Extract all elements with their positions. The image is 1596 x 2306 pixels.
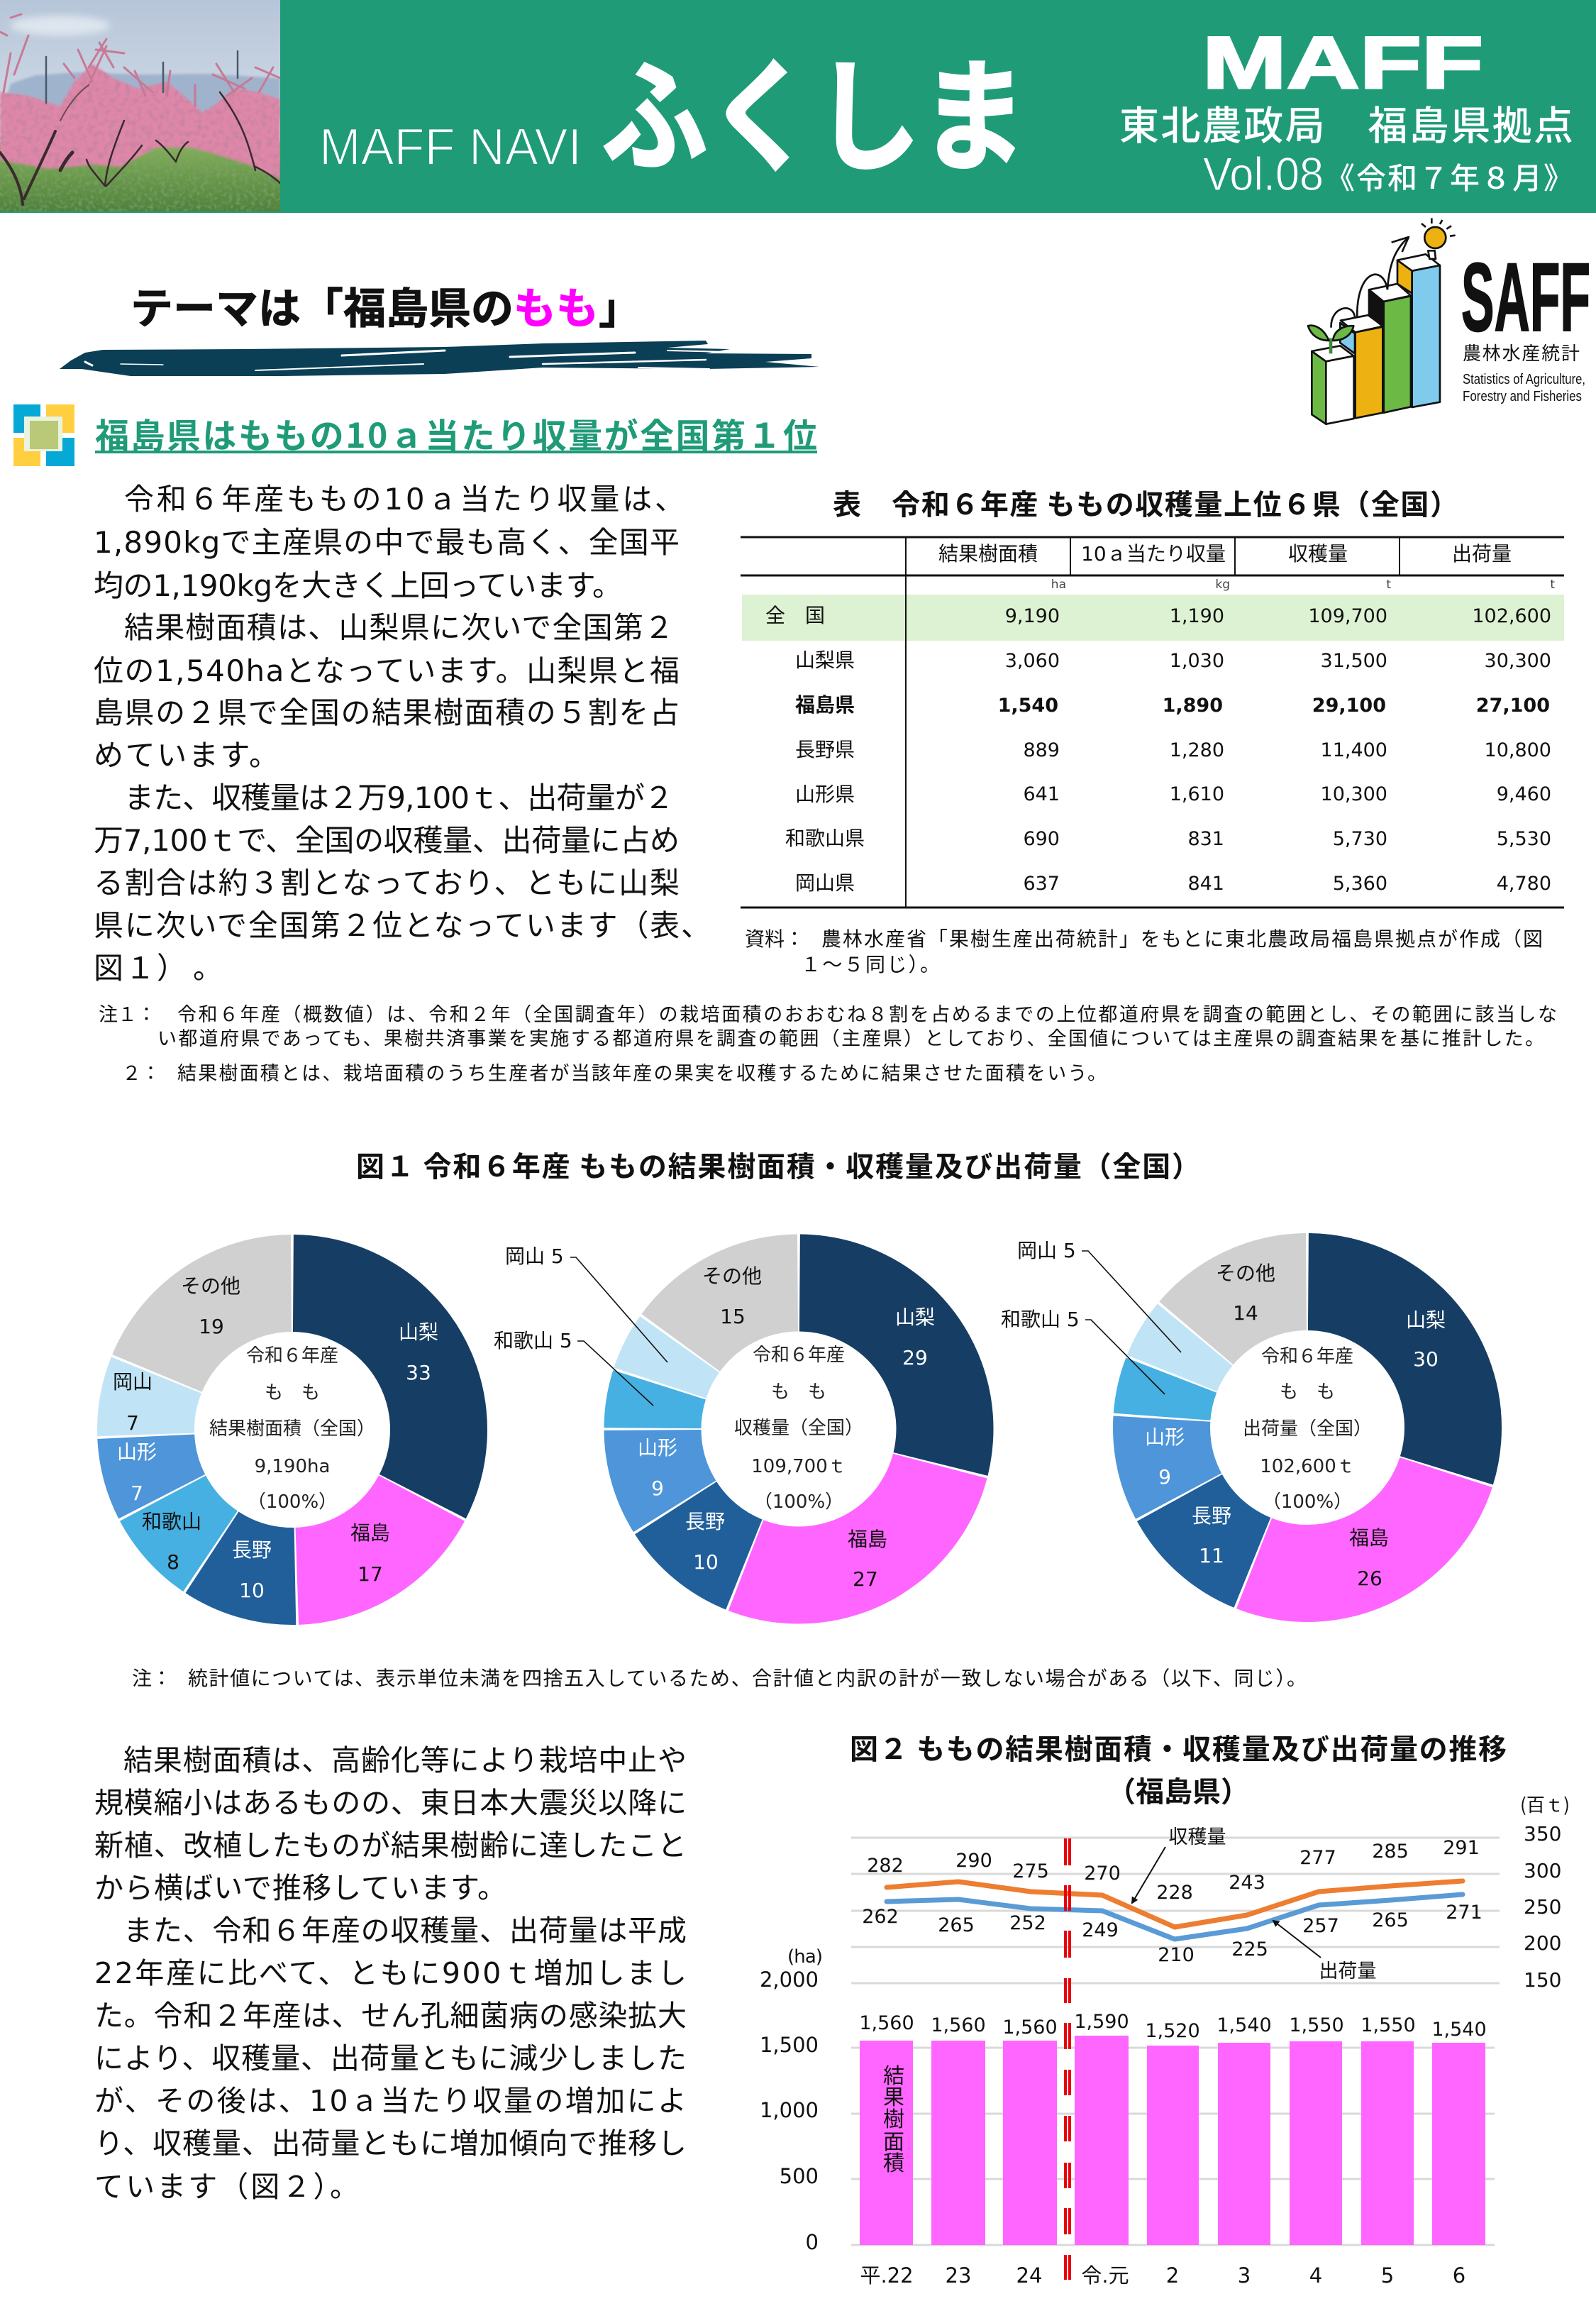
centre caption: 結果樹面積（全国） [209,1418,375,1440]
row: Okayama: 5,360 [1333,873,1387,895]
bar value labels: 1,550 [1289,2014,1344,2036]
row: Wakayama: 690 [1023,828,1060,850]
slice labels: 14 [1233,1301,1258,1325]
slice labels: 長野 [1192,1504,1231,1528]
row: national: 全 国 [765,604,825,627]
row: Nagano: 1,280 [1170,739,1224,761]
slice labels: 7 [131,1482,143,1505]
slice labels: 山形 [117,1440,157,1464]
unit row: kg [1215,578,1230,592]
harvest value labels: 291 [1443,1837,1480,1859]
figure 2 title: 図２ ももの結果樹面積・収穫量及び出荷量の推移 [850,1726,1507,1767]
row: Nagano: 889 [1023,739,1060,761]
body text: second block: が、その後は、10ａ当たり収量の増加によ [94,2084,687,2118]
right axis labels: 350 [1524,1822,1561,1846]
centre caption: （100%） [1263,1491,1352,1513]
harvest value labels: 270 [1084,1863,1121,1885]
x axis labels: 6 [1453,2263,1465,2288]
row: Nagano: 長野県 [795,738,855,761]
slice labels: 長野 [232,1538,272,1562]
row: Wakayama: 和歌山県 [785,827,865,850]
centre caption: 出荷量（全国） [1243,1418,1372,1440]
callout: harvest [1132,1826,1226,1903]
centre caption: 令和６年産 [1261,1346,1353,1367]
body text: first block: 島県の２県で全国の結果樹面積の５割を占 [94,695,680,730]
slice labels: 山形 [1145,1425,1185,1449]
row: Fukushima: 27,100 [1476,695,1550,717]
shipment value labels: 249 [1082,1919,1119,1941]
centre caption: 令和６年産 [246,1345,338,1367]
row: Fukushima: 1,540 [998,695,1058,717]
column headers: 収穫量 [1288,542,1348,566]
table rules [741,537,1564,907]
right axis labels: (百ｔ) [1520,1791,1570,1817]
row: national: 109,700 [1308,605,1387,627]
bar value labels: 1,560 [931,2014,986,2036]
row: Yamanashi: 山梨県 [795,649,855,672]
centre caption: 令和６年産 [753,1345,845,1366]
shipment value labels [862,1902,1483,1966]
column headers: 結果樹面積 [938,542,1038,566]
slice labels: 11 [1199,1544,1224,1567]
body text: second block: た。令和２年産は、せん孔細菌病の感染拡大 [94,1999,687,2033]
column headers: 出荷量 [1452,542,1512,566]
left axis labels: 0 [806,2230,819,2254]
harvest value labels: 282 [867,1855,904,1877]
table [741,537,1564,907]
row: national [765,604,1551,627]
harvest value labels: 277 [1299,1847,1336,1869]
x axis labels: 3 [1238,2263,1251,2288]
slice labels [638,1264,935,1591]
body text: second block: り、収穫量、出荷量ともに増加傾向で推移し [94,2126,687,2161]
row: Fukushima [795,693,1550,717]
line: shipment [887,1894,1463,1939]
harvest value labels: 228 [1156,1882,1193,1904]
unit row [1051,578,1555,592]
row: Wakayama: 831 [1187,828,1224,850]
centre caption: 9,190ha [255,1456,330,1477]
organisation name: 東北農政局 福島県拠点 [1119,94,1573,152]
bar value labels: 1,550 [1361,2014,1416,2036]
figure 2 title: （福島県） [1107,1769,1249,1810]
national row highlight [742,595,1564,641]
row: national: 1,190 [1170,605,1224,627]
row: Fukushima: 1,890 [1163,695,1223,717]
slice labels: 26 [1357,1567,1382,1590]
slice labels: 山梨 [399,1320,438,1344]
slice labels: その他 [702,1264,762,1288]
x axis labels: 2 [1166,2263,1179,2288]
shipment value labels: 262 [862,1906,899,1928]
vertical bar label: 果 [883,2080,904,2111]
slice labels: 山形 [638,1436,677,1460]
body text: first block: 位の1,540haとなっています。山梨県と福 [94,653,680,688]
figure 1 note: 統計値については、表示単位未満を四捨五入しているため、合計値と内訳の計が一致しない場合がある（以下、同じ）。 [188,1667,1307,1690]
MAFF logotype: MAFF [1202,22,1483,104]
bar value labels [859,2011,1487,2042]
left axis labels: 2,000 [760,1968,819,1992]
body text: first block: 。 [193,951,223,986]
body text: second block: から横ばいで推移しています。 [94,1871,506,1905]
footnotes: ２： [122,1063,160,1085]
shipment value labels: 210 [1158,1944,1195,1966]
slice labels: 福島 [350,1521,390,1545]
combo chart: bearing area, harvest and shipment trend [760,1791,1570,2288]
callout: Okayama: 岡山 5 [1017,1239,1076,1262]
row: Okayama: 岡山県 [795,871,855,895]
slice labels: その他 [1216,1262,1275,1285]
table source note: 資料： [745,927,804,951]
centre caption: も も [771,1381,826,1403]
centre caption [734,1345,863,1513]
body text: second block: 22年産に比べて、ともに900ｔ増加しまし [94,1956,687,1990]
row: Fukushima: 福島県 [795,693,855,717]
row: Nagano: 11,400 [1321,739,1387,761]
right axis labels: 200 [1524,1931,1561,1955]
table source note [745,927,1543,976]
left axis labels: 1,500 [760,2033,819,2057]
row: Yamagata: 9,460 [1497,783,1551,805]
centre caption: 102,600ｔ [1260,1456,1355,1477]
grid lines [851,1838,1500,2245]
footnotes: 令和６年産（概数値）は、令和２年（全国調査年）の栽培面積のおおむね８割を占めるまでの上位都道府県を調査の範囲とし、その範囲に該当しな [177,1004,1557,1026]
unit row: ha [1051,578,1066,592]
logo Japanese caption: 農林水産統計 [1463,339,1580,365]
shipment value labels: 265 [1372,1909,1409,1931]
body text: second block: 規模縮小はあるものの、東日本大震災以降に [94,1786,687,1820]
centre caption [209,1345,375,1513]
vertical bar label: 結 [883,2058,904,2090]
left axis labels: 1,000 [760,2098,819,2122]
body text: second block: により、収穫量、出荷量ともに減少しました [94,2041,687,2075]
header band [0,0,1596,213]
slice labels: 33 [406,1361,431,1384]
donut chart: shipment [1001,1239,1453,1590]
left axis labels: (ha) [787,1946,823,1968]
harvest value labels: 285 [1372,1841,1409,1863]
row: Yamanashi: 1,030 [1170,650,1224,672]
row: Nagano [795,738,1551,761]
row: Okayama: 841 [1187,873,1224,895]
theme title: テーマは「福島県のもも」 [131,275,641,336]
figure 2 title [850,1726,1507,1810]
body text: first block: また、収穫量は２万9,100ｔ、出荷量が２ [124,780,674,815]
callout: Okayama [505,1245,667,1362]
shipment value labels: 257 [1302,1915,1339,1937]
row: Wakayama: 5,730 [1333,828,1387,850]
row: Yamanashi: 30,300 [1485,650,1551,672]
red axis break: Heisei to Reiwa [1065,1838,1070,2280]
callout: shipment [1273,1921,1376,1982]
slice labels: 17 [358,1562,383,1586]
vertical bar label: 面 [883,2124,904,2156]
bars: bearing area [860,2036,1485,2245]
column headers: 10ａ当たり収量 [1081,542,1226,566]
right axis labels: 150 [1524,1968,1561,1992]
slice labels: 和歌山 [142,1510,201,1533]
bar value labels: 1,560 [859,2012,914,2034]
slice labels: その他 [181,1274,240,1298]
photo: peach orchard in bloom [0,0,280,211]
slice labels: 長野 [685,1510,725,1533]
table title: 表 令和６年産 ももの収穫量上位６県（全国） [833,482,1458,523]
shipment value labels: 271 [1446,1902,1483,1924]
bar value labels: 1,540 [1217,2014,1272,2036]
harvest value labels: 243 [1229,1872,1265,1894]
line: harvest [887,1881,1463,1927]
slice labels [113,1274,438,1602]
unit row: t [1386,578,1391,592]
body text: first block: 万7,100ｔで、全国の収穫量、出荷量に占め [94,823,680,858]
bar value labels: 1,540 [1431,2019,1487,2041]
unit row: t [1550,578,1555,592]
body text: first block: 結果樹面積は、山梨県に次いで全国第２ [124,610,674,645]
row: Yamagata: 山形県 [795,783,855,806]
x axis labels: 24 [1016,2263,1042,2288]
body text: first block: 図１） [94,951,187,986]
shipment value labels: 252 [1009,1912,1046,1934]
callout: Wakayama [1001,1308,1165,1394]
slice labels: 30 [1413,1347,1439,1371]
row: national: 9,190 [1005,605,1060,627]
body text: first block: 均の1,190kgを大きく上回っています。 [94,568,622,603]
callout: harvest: 収穫量 [1169,1826,1226,1848]
x axis labels: 4 [1309,2263,1322,2288]
brush stroke under theme title [60,341,819,376]
body text: first block: めています。 [94,738,279,773]
row: national: 102,600 [1472,605,1551,627]
row: Okayama: 4,780 [1497,873,1551,895]
row: Yamanashi: 3,060 [1005,650,1060,672]
body text: second block: また、令和６年産の収穫量、出荷量は平成 [123,1914,687,1948]
issue date: 《令和７年８月》 [1325,155,1573,198]
harvest value labels [867,1837,1480,1904]
right axis labels: 250 [1524,1895,1561,1919]
row: Yamanashi [795,649,1551,672]
slice labels: 15 [720,1305,746,1328]
callout: Wakayama: 和歌山 5 [494,1329,572,1352]
icon: rising bar chart with sprout and light bulb [1308,218,1456,424]
harvest value labels: 275 [1012,1860,1049,1882]
footnotes: 結果樹面積とは、栽培面積のうち生産者が当該年産の果実を収穫するために結果させた面積をいう。 [177,1063,1107,1085]
centre caption: （100%） [754,1491,843,1513]
column headers [938,542,1512,566]
slice labels: 9 [651,1477,664,1500]
right axis labels: 300 [1524,1859,1561,1882]
donut chart: bearing area [113,1274,438,1602]
shipment value labels: 265 [938,1914,975,1936]
centre caption [1243,1346,1372,1513]
bar value labels: 1,520 [1145,2020,1200,2042]
slice labels: 8 [167,1550,179,1574]
slice labels: 山梨 [1406,1308,1446,1332]
slice labels: 福島 [848,1528,887,1551]
table source note: 農林水産省「果樹生産出荷統計」をもとに東北農政局福島県拠点が作成（図 [821,927,1543,951]
row: Yamagata: 10,300 [1321,783,1387,805]
body text: second block: 結果樹面積は、高齢化等により栽培中止や [123,1743,687,1777]
x axis labels: 令.元 [1081,2263,1129,2288]
slice labels: 10 [693,1550,719,1574]
vertical bar label: 樹 [883,2102,904,2133]
row: Yamagata: 1,610 [1170,783,1224,805]
body text: first block [94,482,711,986]
slice labels: 10 [239,1579,265,1602]
slice labels: 山梨 [895,1306,935,1329]
row: Nagano: 10,800 [1485,739,1551,761]
bar value labels: 1,560 [1002,2017,1058,2039]
row: Okayama: 637 [1023,873,1060,895]
row: Wakayama [785,827,1551,850]
body text: first block: 令和６年産ももの10ａ当たり収量は、 [124,482,685,517]
harvest value labels: 290 [955,1850,992,1872]
row: Fukushima: 29,100 [1312,695,1386,717]
figure 1 title: 図１ 令和６年産 ももの結果樹面積・収穫量及び出荷量（全国） [356,1144,1200,1185]
vertical bar label [883,2058,904,2177]
left axis labels: 500 [780,2164,819,2188]
body text: first block: る割合は約３割となっており、ともに山梨 [94,866,680,900]
x axis labels: 5 [1381,2263,1394,2288]
slice labels: 福島 [1349,1526,1389,1550]
slice labels: 7 [126,1411,139,1435]
row: Yamagata: 641 [1023,783,1060,805]
volume number: Vol.08 [1203,148,1324,200]
body text: first block: 1,890kgで主産県の中で最も高く、全国平 [94,525,680,560]
donut chart: harvest [494,1245,945,1591]
row: Yamagata [795,783,1551,806]
slice labels: 岡山 [113,1370,153,1394]
table source note: １～５同じ）。 [801,953,940,976]
right axis labels [1520,1791,1570,1992]
slice labels: 29 [902,1346,928,1369]
footnotes: い都道府県であっても、果樹共済事業を実施する都道府県を調査の範囲（主産県）としており、全国値については主産県の調査結果を基に推計した。 [157,1028,1544,1050]
callout: Okayama: 岡山 5 [505,1245,564,1268]
slice labels: 19 [199,1315,224,1338]
slice labels: 9 [1158,1465,1171,1489]
callout: Wakayama: 和歌山 5 [1001,1308,1080,1331]
body text: second block: ています（図２）。 [94,2170,359,2204]
slice labels [1145,1262,1446,1590]
masthead: MAFF NAVI: MAFF NAVI [319,118,582,176]
row: Wakayama: 5,530 [1497,828,1551,850]
figure 1 note: 注： [132,1667,172,1690]
row: Yamanashi: 31,500 [1321,650,1387,672]
section heading: 福島県はももの10ａ当たり収量が全国第１位 [95,408,817,458]
footnotes: 注１： [99,1004,156,1026]
centre caption: 109,700ｔ [751,1456,846,1477]
left axis labels [760,1946,823,2254]
x axis labels: 平.22 [860,2263,914,2288]
callout: Okayama [1017,1239,1181,1352]
vertical bar label: 積 [883,2146,904,2177]
body text: second block: 新植、改植したものが結果樹齢に達したこと [94,1828,687,1863]
footnotes [99,1004,1557,1085]
slice labels: 27 [853,1567,878,1591]
callout: Wakayama [494,1329,653,1406]
body text: second block [94,1743,687,2204]
masthead: ふくしま: ふくしま [602,18,1027,196]
bar value labels: 1,590 [1074,2011,1129,2033]
SAFF logo [1308,218,1590,424]
centre caption: も も [265,1382,320,1403]
shipment value labels: 225 [1231,1938,1268,1960]
centre caption: も も [1280,1381,1335,1403]
x axis labels [860,2263,1465,2288]
centre caption: 収穫量（全国） [734,1418,863,1439]
callout: shipment: 出荷量 [1319,1960,1376,1982]
icon: section square [13,404,74,466]
x axis labels: 23 [946,2263,971,2288]
body text: first block: 県に次いで全国第２位となっています（表、 [94,908,711,943]
centre caption: （100%） [248,1491,337,1513]
row: Okayama [795,871,1551,895]
